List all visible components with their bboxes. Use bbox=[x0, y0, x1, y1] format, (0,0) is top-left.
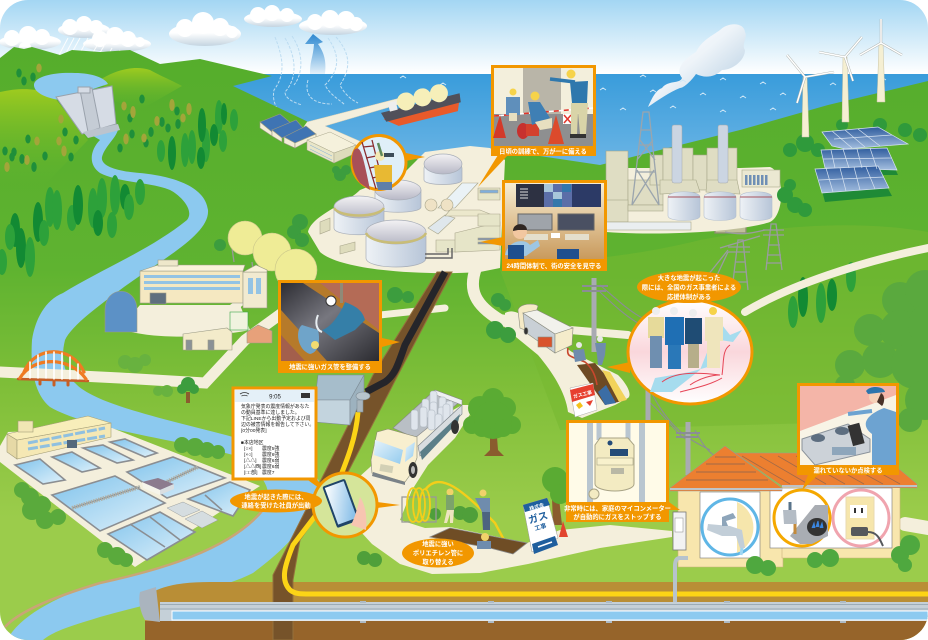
photo inset: earthquake-resistant pipe: 地震に強いガス管を整備する bbox=[289, 362, 371, 371]
phone message popup: の動員基準に達しました。 bbox=[241, 409, 300, 416]
water treatment plant bbox=[0, 416, 260, 567]
photo inset: smart meter bbox=[564, 420, 671, 522]
house circle: gas burner bbox=[774, 490, 830, 546]
small round trees bbox=[2, 68, 181, 172]
dam lake bbox=[34, 73, 108, 100]
phone message popup: 震度7 bbox=[262, 469, 275, 476]
construction sign bbox=[523, 498, 558, 554]
rising vapor arrow and dashed lines bbox=[273, 34, 358, 112]
phone message popup: 震度5強 bbox=[262, 445, 280, 452]
transmission towers and wires bbox=[700, 221, 784, 290]
phone message popup: [×○] bbox=[244, 452, 253, 458]
photo inset: drills bbox=[491, 65, 596, 156]
house bbox=[670, 446, 917, 567]
gas meter on house wall bbox=[673, 512, 688, 602]
callout: national support: 際には、全国のガス事業者による bbox=[642, 282, 736, 292]
underground trench bbox=[273, 272, 452, 640]
LNG terminal ground bbox=[308, 146, 505, 273]
phone message popup: 辺の被害情報を報告して下さい。 bbox=[241, 421, 314, 428]
phone message popup: [□□部] bbox=[244, 470, 258, 476]
big tree bbox=[463, 388, 521, 456]
green tree clump right bbox=[835, 270, 928, 432]
circle inset: smartphone bbox=[313, 473, 377, 537]
polyethylene pipe replacement work bbox=[402, 482, 527, 554]
phone message popup: 9:05 bbox=[269, 394, 281, 400]
callout: national support bbox=[637, 271, 741, 303]
photo inset: drills: 日頃の訓練で、万が一に備える bbox=[499, 146, 587, 156]
photo inset: control room bbox=[502, 180, 607, 271]
gas tank truck bbox=[371, 390, 462, 485]
callout: polyethylene pipe bbox=[402, 538, 474, 568]
house circle: water tap bbox=[702, 499, 758, 555]
bushes by treatment plant bbox=[14, 437, 225, 567]
phone message popup: [△△] bbox=[244, 457, 257, 464]
photo inset: earthquake-resistant pipe bbox=[278, 280, 382, 373]
right bright field bbox=[500, 225, 928, 430]
utility excavation and workers bbox=[568, 336, 627, 405]
breakwater and port bbox=[304, 98, 398, 146]
phone message popup: ■本店地区 bbox=[241, 439, 264, 446]
campus bbox=[105, 260, 272, 350]
waves bbox=[400, 75, 886, 112]
callout: polyethylene pipe: 取り替える bbox=[422, 557, 454, 566]
leader lines bbox=[305, 153, 818, 510]
construction sign: ガス bbox=[527, 509, 549, 527]
callout: dispatch bbox=[230, 490, 322, 512]
LNG terminal road bbox=[230, 303, 243, 307]
solar panels bbox=[815, 127, 908, 202]
service van bbox=[518, 304, 573, 353]
bushes near terminal bbox=[214, 165, 516, 343]
construction sign at work site bbox=[570, 383, 597, 417]
bushes by wind farm bbox=[777, 118, 927, 217]
warehouses bbox=[260, 114, 316, 148]
circle inset: tank inspection bbox=[352, 136, 406, 190]
phone message popup: [○×] bbox=[244, 446, 253, 452]
phone message popup: 震度6弱 bbox=[262, 463, 280, 470]
river bbox=[7, 126, 320, 640]
construction sign: 株式会 bbox=[529, 502, 545, 512]
bush beside excavation bbox=[357, 506, 478, 567]
construction sign: 工事 bbox=[534, 522, 547, 533]
callout: national support: 大きな地震が起こった bbox=[658, 273, 720, 282]
photo inset: control room: 24時間体制で、街の安全を見守る bbox=[507, 261, 601, 270]
callout: dispatch: 地震が起きた際には、 bbox=[245, 492, 307, 501]
photo inset: smart meter: 非常時には、家庭のマイコンメーター bbox=[564, 504, 671, 512]
sky bbox=[0, 0, 928, 74]
phone message popup: 震度6弱 bbox=[262, 457, 280, 464]
dam bbox=[56, 86, 120, 138]
cream work site bbox=[505, 311, 630, 418]
bridge bbox=[18, 352, 88, 385]
tree behind construction sign bbox=[542, 467, 570, 525]
clouds bbox=[0, 5, 367, 52]
port building bbox=[307, 132, 356, 163]
circle inset: nationwide support bbox=[628, 300, 752, 404]
phone message popup bbox=[233, 388, 316, 479]
LNG tanker bbox=[381, 84, 461, 126]
conifer forest bbox=[0, 100, 856, 328]
rain bbox=[59, 38, 120, 55]
phone message popup: 下記LINEから出動予定および周 bbox=[241, 415, 311, 422]
callout: polyethylene pipe: 地震に強い bbox=[422, 539, 454, 548]
callout: polyethylene pipe: ポリエチレン管に bbox=[413, 548, 463, 557]
cream lot near truck and excavation bbox=[350, 405, 672, 574]
phone message popup: [△△西] bbox=[244, 463, 262, 470]
smoke plume bbox=[648, 24, 746, 107]
photo inset: smart meter: が自動的にガスをストップする bbox=[573, 512, 662, 521]
trees and shrubs around bridge bbox=[118, 354, 199, 403]
construction sign at work site: ガス工事 bbox=[572, 389, 593, 400]
wind turbines bbox=[787, 19, 902, 137]
underground soil bbox=[145, 582, 928, 640]
main water pipe bbox=[139, 587, 928, 623]
LNG tanks bbox=[334, 154, 462, 267]
spherical gas holders bbox=[228, 220, 318, 282]
callout: dispatch: 連絡を受けた社員が出動 bbox=[241, 500, 311, 510]
phone message popup: 震度6強 bbox=[262, 451, 280, 458]
cream roads bbox=[0, 248, 928, 528]
callout: national support: 応援体制がある bbox=[667, 292, 711, 301]
yellow polyethylene pipe bbox=[284, 412, 928, 594]
concrete valve building bbox=[315, 375, 370, 425]
phone message popup: [0分00発表] bbox=[241, 427, 267, 434]
steel gas pipe bbox=[366, 272, 445, 392]
photo inset: leak check bbox=[797, 383, 899, 475]
traffic cone bbox=[559, 521, 568, 537]
house circle: outlet bbox=[833, 490, 889, 546]
phone message popup: 気象庁発表の震度情報があなた bbox=[241, 403, 310, 410]
photo inset: leak check: 漏れていないか点検する bbox=[813, 466, 883, 474]
sea bbox=[233, 74, 928, 165]
hills bbox=[0, 68, 182, 156]
autumn trees bbox=[4, 64, 192, 172]
power plant bbox=[606, 112, 781, 234]
house shrubs bbox=[746, 535, 920, 576]
terminal buildings bbox=[320, 183, 500, 258]
utility poles and wires bbox=[582, 278, 722, 475]
